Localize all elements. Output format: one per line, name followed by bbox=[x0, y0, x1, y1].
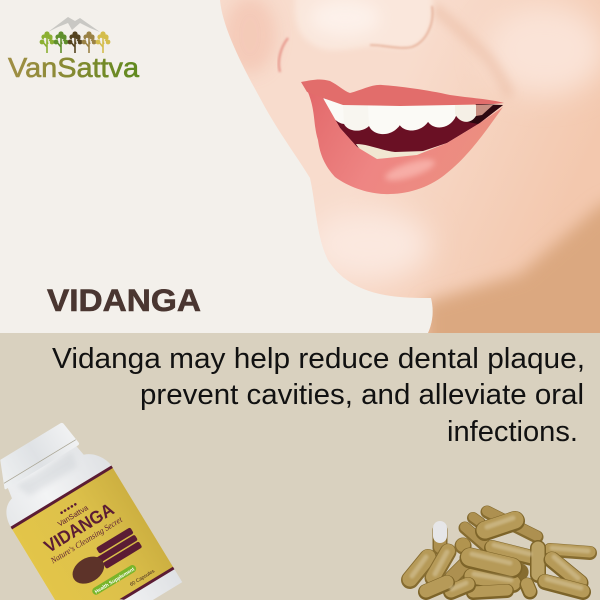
photo: smiling face bbox=[220, 0, 600, 333]
bottom background panel bbox=[0, 333, 600, 600]
white capsule cap bbox=[433, 528, 447, 536]
lower lip bbox=[307, 90, 503, 194]
lower teeth bbox=[356, 143, 447, 159]
body text: infections. bbox=[447, 416, 578, 448]
logo wordmark: VanSattva bbox=[8, 52, 139, 83]
label capsule count: 60 Capsules bbox=[129, 568, 156, 588]
face skin bbox=[215, 0, 600, 333]
logo mountains bbox=[48, 17, 100, 32]
product bottle bbox=[0, 412, 182, 600]
top background panel bbox=[0, 0, 600, 333]
logo trees bbox=[40, 31, 110, 53]
capsule pile bbox=[410, 511, 590, 593]
label benefit bars bbox=[89, 527, 142, 572]
upper lip bbox=[301, 79, 504, 106]
body text: prevent cavities, and alleviate oral bbox=[140, 379, 584, 411]
bottle label bbox=[11, 465, 174, 600]
logo: VanSattva bbox=[8, 17, 139, 83]
bottle cap bbox=[0, 420, 80, 490]
neck shadow bbox=[16, 451, 81, 499]
back capsule outlines and fills bbox=[410, 511, 590, 580]
capsule highlights bbox=[412, 518, 588, 589]
label brand trees bbox=[60, 503, 77, 514]
nose bbox=[295, 0, 433, 50]
bottle body bbox=[0, 435, 182, 600]
heading: VIDANGA bbox=[47, 282, 201, 318]
label seeds bbox=[68, 551, 109, 589]
label green badge: Health Supplement bbox=[94, 566, 136, 595]
label product name: VIDANGA bbox=[41, 499, 118, 557]
body text bbox=[52, 343, 585, 448]
smile crease bbox=[279, 38, 288, 72]
body text: Vidanga may help reduce dental plaque, bbox=[52, 343, 585, 375]
lower lip highlight bbox=[384, 158, 436, 182]
mouth interior bbox=[322, 98, 503, 152]
label brand: VanSattva bbox=[56, 503, 90, 528]
label tagline: Nature's Cleansing Secret bbox=[48, 514, 124, 566]
front capsule outlines and fills bbox=[426, 520, 583, 593]
dark mouth corner bbox=[468, 104, 503, 124]
upper teeth bbox=[323, 98, 493, 134]
skin shading bbox=[224, 0, 600, 380]
